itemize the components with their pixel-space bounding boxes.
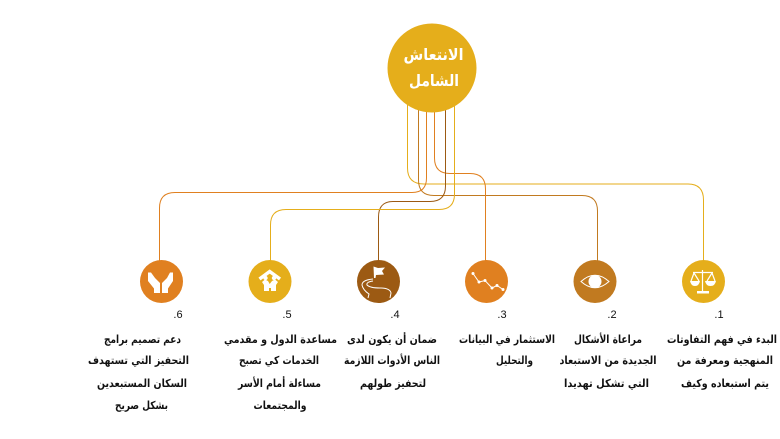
text: item 6: بشكل صريح	[115, 399, 168, 412]
text: item 2: الجديدة من الاستبعاد	[560, 354, 656, 367]
central circle title: الشامل	[409, 71, 459, 90]
number labels: .1	[714, 309, 724, 321]
text: item 3: والتحليل	[496, 354, 533, 367]
icon: scales	[682, 260, 725, 303]
icon: caring hands	[140, 260, 183, 303]
icon: eye	[574, 260, 616, 303]
text: item 4: الناس الأدوات اللازمة	[344, 353, 440, 367]
text: item 4: لتحفيز طولهم	[360, 377, 426, 390]
text: item 1	[667, 333, 777, 390]
text: item 2: التي تشكل تهديدا	[564, 377, 649, 390]
number labels: .6	[173, 309, 183, 321]
central circle title: الانتعاش	[404, 45, 464, 64]
text: item 5: الخدمات كي تصبح	[239, 354, 319, 367]
text: item 5: مساعدة الدول و مقدمي	[224, 333, 337, 346]
text: item 6: السكان المستبعدين	[97, 377, 187, 390]
text: item 2	[560, 332, 656, 390]
central circle title	[388, 24, 476, 112]
text: item 3	[459, 333, 555, 367]
icon: data line chart	[465, 260, 508, 303]
text: item 6: دعم تصميم برامج	[104, 333, 181, 346]
text: item 3: الاستثمار في البيانات	[459, 333, 555, 346]
text: item 5: والمجتمعات	[254, 399, 307, 412]
number labels: .5	[282, 309, 292, 321]
text: item 6: التحفيز التي تستهدف	[88, 354, 189, 367]
number labels: .4	[390, 309, 400, 321]
text: item 2: مراعاة الأشكال	[574, 332, 642, 346]
text: item 5: مساءلة أمام الأسر	[237, 376, 321, 390]
connector lines	[160, 105, 704, 262]
text: item 4: ضمان أن يكون لدى	[347, 332, 437, 346]
icon: family under roof	[248, 260, 292, 303]
number labels: .3	[497, 309, 507, 321]
text: item 6	[88, 333, 189, 412]
text: item 5	[224, 333, 337, 412]
icon: winding road with flag	[357, 260, 400, 303]
text: item 4	[344, 332, 440, 390]
text: item 1: يتم استبعاده وكيف	[681, 377, 769, 390]
number labels	[173, 309, 724, 321]
number labels: .2	[607, 309, 617, 321]
